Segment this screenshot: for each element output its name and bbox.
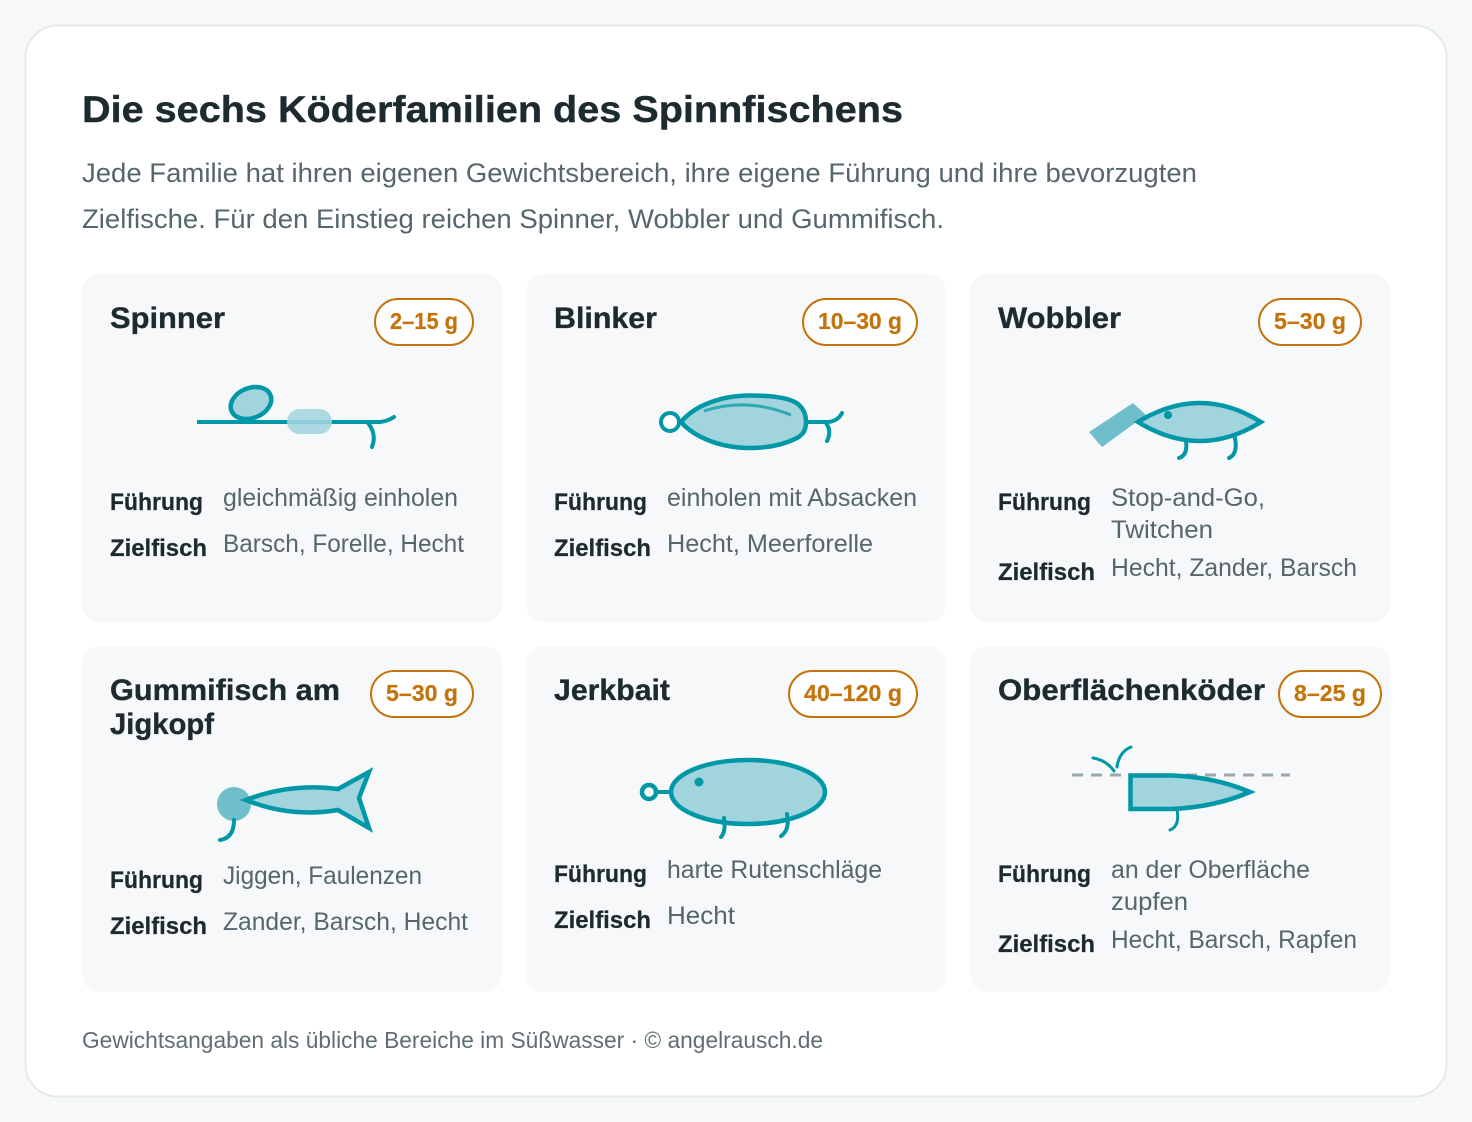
weight badge: 5–30 g [1259, 299, 1361, 345]
details: Gummifisch am Jigkopf [110, 862, 468, 940]
title: Die sechs Köderfamilien des Spinnfischens [82, 89, 903, 130]
details: Gummifisch am Jigkopf: Zielfisch [110, 913, 207, 940]
details: Oberflächenköder [998, 856, 1357, 958]
details: Jerkbait: Zielfisch [554, 907, 651, 934]
panel: Spinner [82, 274, 502, 622]
weight badge: 2–15 g [375, 299, 473, 345]
panel: Oberflächenköder [970, 646, 1390, 992]
details: Wobbler: Hecht, Zander, Barsch [1111, 554, 1357, 582]
heading: Blinker: Blinker [554, 302, 657, 335]
heading: Spinner: Spinner [110, 302, 225, 335]
details: Blinker: Führung [554, 489, 647, 516]
weight badge: 5–30 g: 5–30 g [386, 680, 458, 706]
details: Wobbler [998, 484, 1357, 586]
weight badge: 10–30 g [803, 299, 917, 345]
details: Blinker: Zielfisch [554, 535, 651, 562]
heading: Oberflächenköder: Oberflächenköder [998, 674, 1265, 707]
weight badge: 8–25 g: 8–25 g [1294, 680, 1366, 706]
icon: surface lure on water line [1072, 747, 1290, 830]
weight badge: 8–25 g [1279, 671, 1381, 717]
weight badge: 2–15 g: 2–15 g [390, 308, 458, 334]
details: Spinner: Führung [110, 489, 203, 516]
icon: blinker lure [661, 396, 842, 448]
heading: Gummifisch am Jigkopf: Gummifisch am [110, 674, 340, 707]
details: Spinner: Zielfisch [110, 535, 207, 562]
details: Oberflächenköder: Führung [998, 861, 1091, 888]
heading: Gummifisch am Jigkopf [110, 674, 340, 741]
icon: wobbler lure [1089, 403, 1261, 458]
details: Wobbler: Führung [998, 489, 1091, 516]
details: Gummifisch am Jigkopf: Zander, Barsch, Hecht [223, 908, 468, 936]
heading: Jerkbait: Jerkbait [554, 674, 670, 707]
details: Blinker [554, 484, 917, 562]
weight badge: 40–120 g [789, 671, 917, 717]
details: Oberflächenköder: Hecht, Barsch, Rapfen [1111, 926, 1357, 954]
heading: Gummifisch am Jigkopf: Jigkopf [110, 708, 215, 741]
details: Gummifisch am Jigkopf: Jiggen, Faulenzen [223, 862, 422, 890]
weight badge: 5–30 g [371, 671, 473, 717]
icon: soft bait on jig head [217, 772, 369, 840]
details: Spinner: gleichmäßig einholen [223, 484, 458, 512]
details: Wobbler: Stop-and-Go, [1111, 484, 1265, 512]
weight badge: 10–30 g: 10–30 g [818, 308, 902, 334]
details: Oberflächenköder: zupfen [1111, 888, 1188, 916]
details: Jerkbait: Hecht [667, 902, 735, 930]
panel: Blinker [526, 274, 946, 622]
details: Wobbler: Zielfisch [998, 559, 1095, 586]
details: Oberflächenköder: Zielfisch [998, 931, 1095, 958]
heading: Wobbler: Wobbler [998, 302, 1121, 335]
details: Blinker: einholen mit Absacken [667, 484, 917, 512]
details: Gummifisch am Jigkopf: Führung [110, 867, 203, 894]
intro text [82, 158, 1197, 234]
footer note: Gewichtsangaben als übliche Bereiche im Süßwasser · © angelrausch.de [82, 1027, 823, 1053]
details: Spinner [110, 484, 464, 562]
panel: Gummifisch am Jigkopf [82, 646, 502, 992]
details: Blinker: Hecht, Meerforelle [667, 530, 873, 558]
details: Wobbler: Twitchen [1111, 516, 1213, 544]
details: Jerkbait [554, 856, 882, 934]
details: Oberflächenköder: an der Oberfläche [1111, 856, 1310, 884]
intro text: Zielfische. Für den Einstieg reichen Spinner, Wobbler und Gummifisch. [82, 204, 944, 234]
panel: Wobbler [970, 274, 1390, 622]
weight badge: 40–120 g: 40–120 g [804, 680, 902, 706]
intro text: Jede Familie hat ihren eigenen Gewichtsbereich, ihre eigene Führung und ihre bevorzugten [82, 158, 1197, 188]
details: Jerkbait: harte Rutenschläge [667, 856, 882, 884]
panel: Jerkbait [526, 646, 946, 992]
details: Jerkbait: Führung [554, 861, 647, 888]
details: Spinner: Barsch, Forelle, Hecht [223, 530, 464, 558]
icon: spinner lure [197, 381, 394, 447]
icon: jerkbait lure [642, 760, 825, 837]
weight badge: 5–30 g: 5–30 g [1274, 308, 1346, 334]
